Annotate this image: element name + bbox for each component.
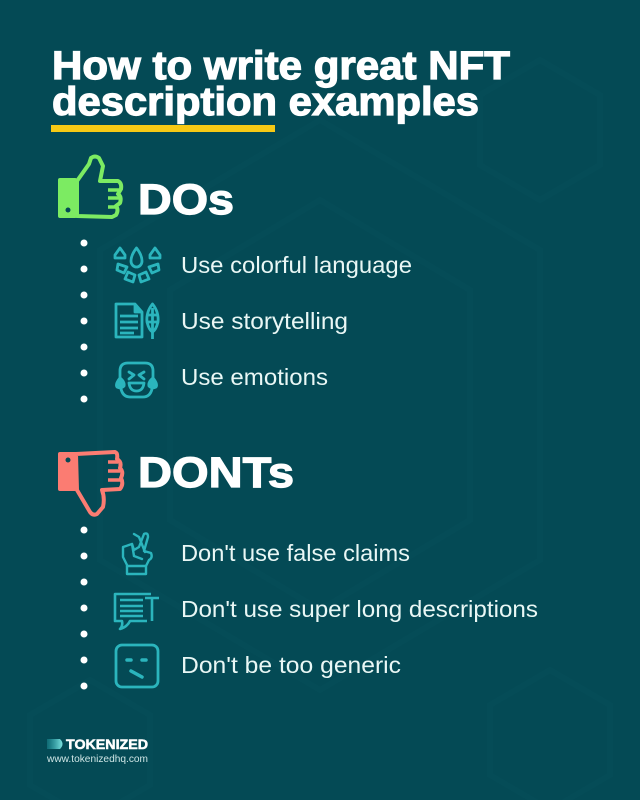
icon: crossed fingers xyxy=(123,533,152,574)
icon: laughing face xyxy=(116,363,157,397)
website url: www.tokenizedhq.com xyxy=(46,753,148,765)
text: storytelling: Use storytelling xyxy=(181,308,348,334)
title: How to write great NFT xyxy=(52,44,510,88)
title underline xyxy=(51,125,275,132)
icon: thumbs down xyxy=(58,452,122,515)
heading: DONTs: DONTs xyxy=(138,449,294,497)
dots: DOs list xyxy=(80,240,88,402)
title: description examples xyxy=(52,80,479,124)
text: emotions: Use emotions xyxy=(181,364,328,390)
icon: long chat message xyxy=(115,594,159,629)
icon: thumbs up xyxy=(58,156,121,218)
icon: skeptical face xyxy=(116,645,158,687)
icon: colorful drops xyxy=(115,248,160,282)
text: false claims: Don't use false claims xyxy=(181,540,410,566)
dots: DONTs list xyxy=(80,526,88,690)
text: too generic: Don't be too generic xyxy=(181,652,401,678)
text: long descriptions: Don't use super long descriptions xyxy=(181,596,538,622)
icon: document and feather xyxy=(116,304,158,339)
title xyxy=(52,44,510,124)
text: colorful language: Use colorful language xyxy=(181,252,412,278)
heading: DOs: DOs xyxy=(138,176,234,224)
logo: Tokenized: TOKENIZED xyxy=(66,737,148,752)
